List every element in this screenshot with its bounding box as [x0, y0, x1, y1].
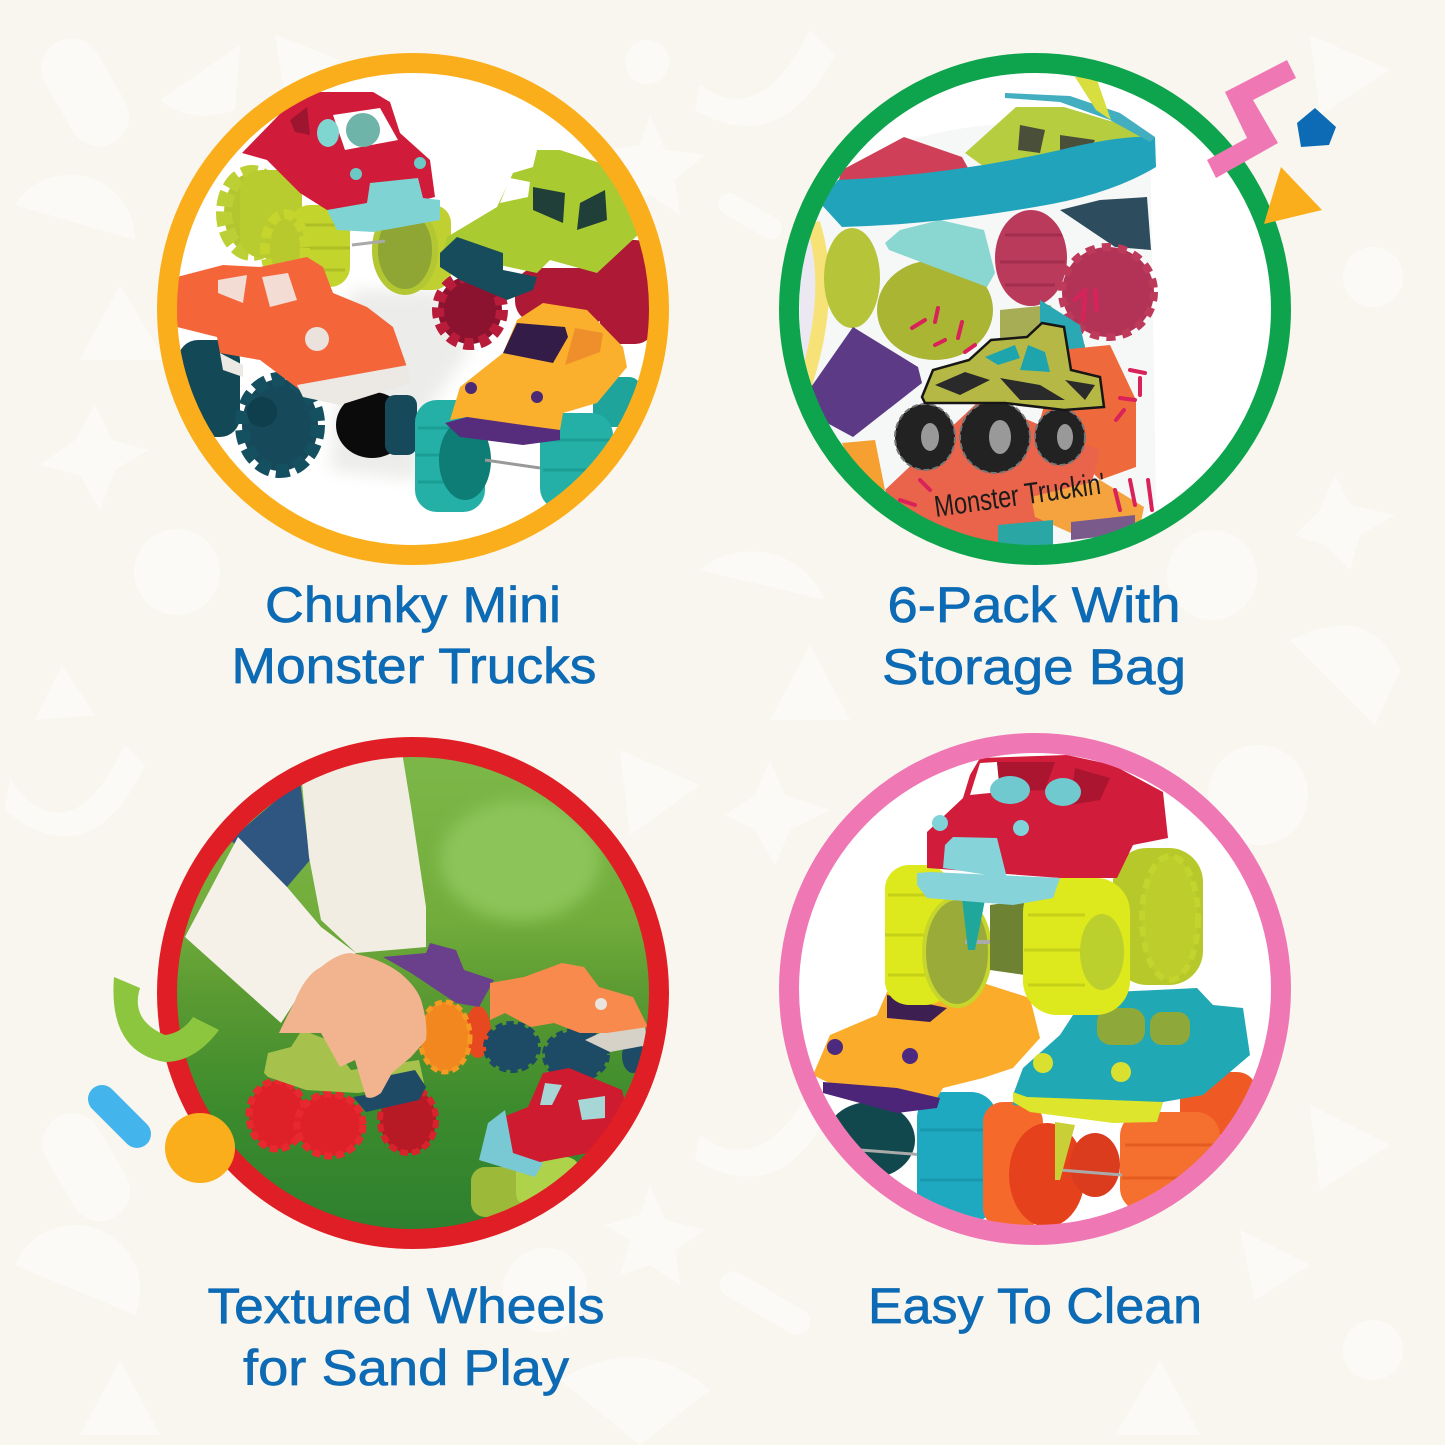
bag print: monster truck drawing	[895, 323, 1104, 473]
child's torso sleeve	[302, 740, 426, 953]
truck: green with red wheels	[249, 1030, 436, 1156]
truck: orange with dark teal wheels	[177, 257, 417, 471]
panel: easy to clean	[780, 735, 1290, 1245]
caption: textured wheels for sand play: for Sand Play	[243, 1340, 569, 1396]
caption: chunky mini monster trucks: Monster Trucks	[232, 638, 596, 694]
truck: purple and orange wheels	[383, 943, 494, 1072]
photo: bag of trucks	[799, 73, 1271, 545]
blue pentagon	[1297, 108, 1336, 147]
child's hand	[279, 953, 426, 1098]
panel: storage bag	[780, 55, 1290, 565]
strap	[1075, 77, 1111, 120]
pink zigzag	[1207, 60, 1296, 178]
storage bag	[800, 123, 1156, 550]
truck: yellow with teal wheels	[813, 982, 1040, 1222]
caption: 6-pack with storage bag: 6-Pack With	[888, 577, 1180, 633]
truck: orange and navy wheels	[486, 963, 648, 1079]
truck: red with lime wheels	[471, 1068, 626, 1217]
truck: yellow with teal wheels	[415, 303, 641, 512]
decoration: top right shapes	[1207, 60, 1336, 224]
zipper	[820, 137, 1156, 227]
truck: teal with orange wheels	[983, 988, 1257, 1228]
yellow circle	[165, 1113, 235, 1183]
caption: textured wheels for sand play: Textured Wheels	[208, 1278, 604, 1334]
photo: child playing on grass	[177, 757, 649, 1229]
panel: sand play	[160, 740, 670, 1250]
truck: red with lime wheels	[224, 92, 451, 292]
ring: green	[789, 63, 1281, 555]
caption: easy to clean: Easy To Clean	[868, 1278, 1202, 1334]
photo: stacked trucks	[799, 753, 1271, 1225]
panel: chunky mini monster trucks	[160, 55, 670, 565]
bag print: Monster Truckin' lettering: Monster Truckin'	[932, 467, 1107, 524]
truck: green with red wheels	[438, 150, 655, 344]
ring: pink	[789, 743, 1281, 1235]
truck: red with lime wheels	[885, 755, 1203, 1015]
photo: four trucks	[177, 73, 649, 545]
ring: red	[167, 747, 659, 1239]
caption: 6-pack with storage bag: Storage Bag	[882, 639, 1186, 695]
green arc	[113, 977, 219, 1062]
child's arm sleeve	[185, 837, 356, 1023]
blue pill	[102, 1099, 137, 1134]
caption: chunky mini monster trucks: Chunky Mini	[265, 577, 561, 633]
yellow triangle	[1264, 167, 1322, 224]
decoration: bottom left shapes	[102, 977, 235, 1183]
ring: yellow	[167, 63, 659, 555]
